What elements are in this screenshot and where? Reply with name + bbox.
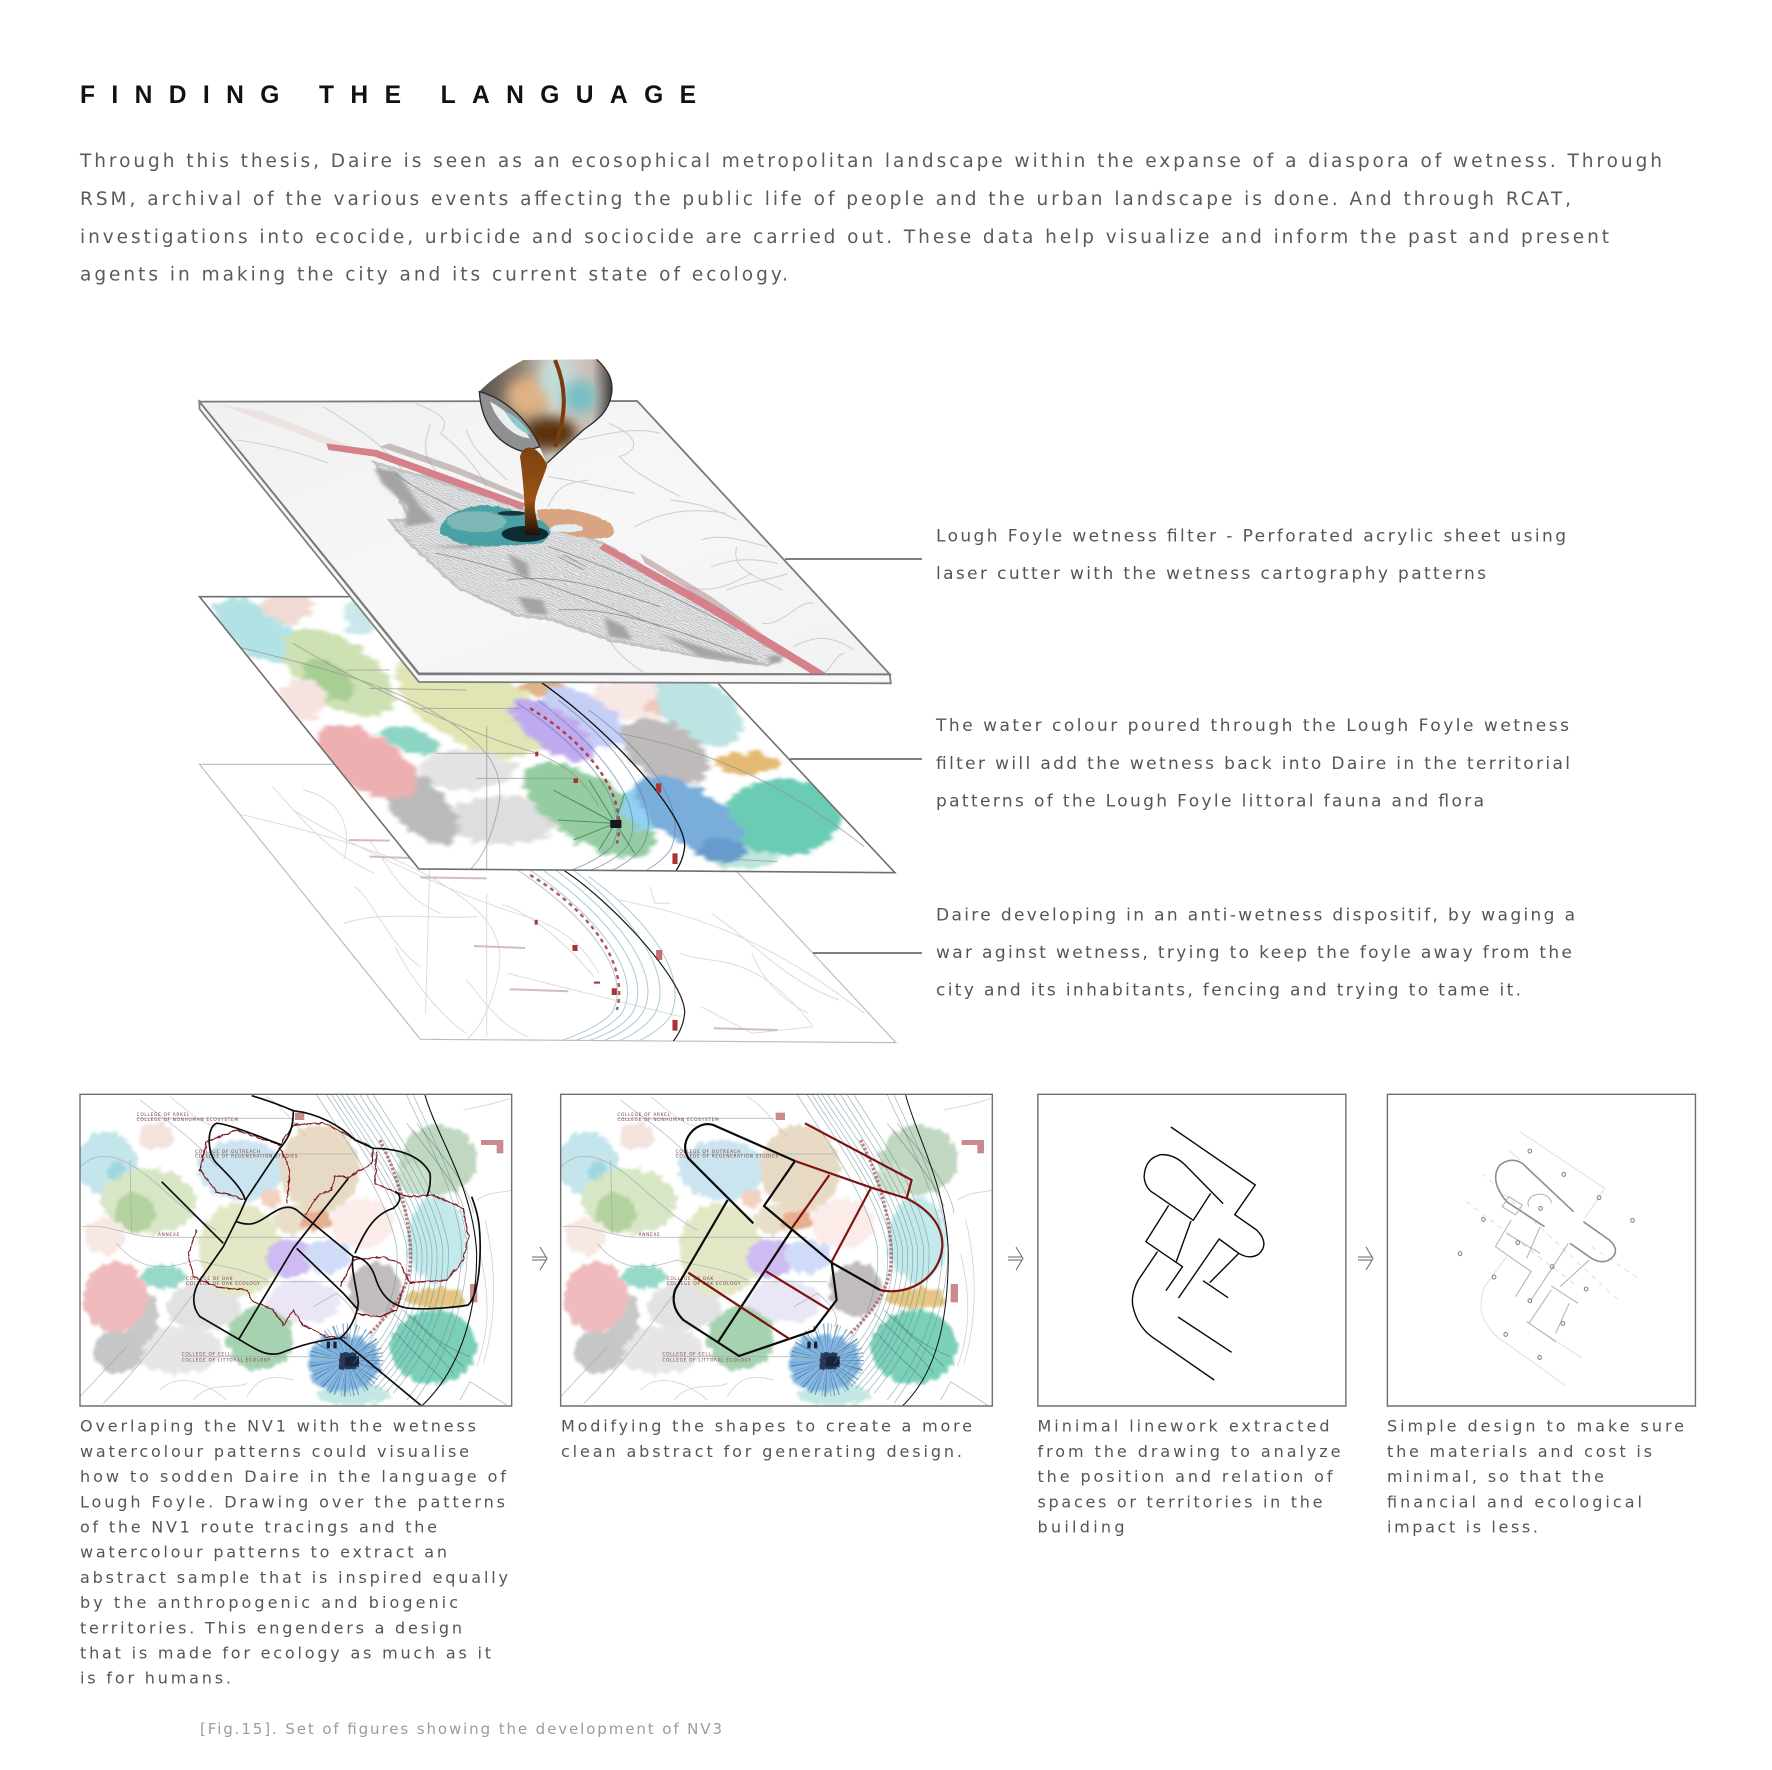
black abstract lines xyxy=(674,1124,880,1356)
caption: simple design: minimal, so that the xyxy=(1387,1467,1604,1486)
red wetness line xyxy=(326,443,525,510)
callout: layer 2 text: patterns of the Lough Foyle littoral fauna and flora xyxy=(936,792,1484,812)
extracted lines xyxy=(1132,1127,1264,1380)
callout: layer 2 text: The water colour poured through the Lough Foyle wetness xyxy=(935,716,1569,736)
thin river line xyxy=(902,1095,948,1406)
caption: simple design: impact is less. xyxy=(1387,1518,1538,1536)
leader line 2 xyxy=(790,758,922,760)
intro text block: Through this thesis, Daire is seen as an ecosophical metropolitan landscape within the expanse of a diaspora of wetness. Through xyxy=(79,151,1662,172)
callout: layer 1 text: laser cutter with the wetness cartography patterns xyxy=(936,564,1486,584)
plan column points xyxy=(1458,1149,1634,1359)
leader line 3 xyxy=(813,952,922,954)
caption: overlap: watercolour patterns could visualise xyxy=(80,1442,469,1461)
caption: modifying: clean abstract for generating design. xyxy=(561,1442,962,1461)
caption: modifying: Modifying the shapes to create a more xyxy=(561,1417,972,1436)
caption: overlap: how to sodden Daire in the language of xyxy=(80,1467,506,1486)
lake cartography xyxy=(221,405,374,457)
caption: overlap: Lough Foyle. Drawing over the patterns xyxy=(80,1492,505,1511)
caption: overlap: Overlaping the NV1 with the wetness xyxy=(80,1417,476,1436)
caption: simple design xyxy=(1387,1417,1684,1536)
callout: layer 2 text xyxy=(935,716,1570,812)
arrow 3 xyxy=(1358,1247,1373,1270)
plan walls xyxy=(1481,1132,1605,1385)
bucket body xyxy=(479,359,612,463)
caption: minimal linework xyxy=(1038,1417,1340,1536)
callout: layer 1 text: Lough Foyle wetness filter - Perforated acrylic sheet using xyxy=(936,526,1566,546)
panel: NV1 overlay map xyxy=(73,1090,520,1410)
black NV1 route lines xyxy=(162,1095,480,1406)
caption: overlap: territories. This engenders a design xyxy=(80,1618,462,1637)
panel: simple floor plan xyxy=(1387,1094,1695,1406)
caption: overlap: abstract sample that is inspired equally xyxy=(80,1568,508,1587)
sheet thickness xyxy=(199,402,891,683)
caption: modifying xyxy=(561,1417,972,1461)
layer 3: anti-wetness line map xyxy=(199,764,896,1043)
intro text block: investigations into ecocide, urbicide and sociocide are carried out. These data help visualize and inform the past and present xyxy=(80,227,1609,248)
leader line 1 xyxy=(785,558,922,560)
caption: overlap xyxy=(80,1417,508,1688)
river tracings xyxy=(237,403,854,673)
callout: layer 3 text: Daire developing in an anti-wetness dispositif, by waging a xyxy=(936,906,1575,926)
caption: minimal linework: Minimal linework extracted xyxy=(1038,1417,1330,1436)
red abstract lines xyxy=(688,1123,942,1339)
bucket opening xyxy=(479,392,540,452)
title: FINDING THE LANGUAGE xyxy=(80,82,696,109)
callout: layer 3 text: city and its inhabitants, fencing and trying to tame it. xyxy=(936,980,1521,1000)
icon: paint bucket pouring watercolour xyxy=(440,359,614,546)
panel: minimal linework xyxy=(1038,1094,1346,1406)
layer 2: watercolour wetness map xyxy=(197,589,895,875)
caption: minimal linework: building xyxy=(1038,1518,1124,1536)
callout: layer 3 text xyxy=(936,906,1575,1000)
poured stream xyxy=(520,448,547,535)
caption: simple design: financial and ecological xyxy=(1387,1492,1642,1511)
panel: exploded layers diagram xyxy=(197,359,922,1043)
intro text block xyxy=(79,151,1662,286)
caption: simple design: the materials and cost is xyxy=(1387,1442,1652,1461)
caption: minimal linework: from the drawing to analyze xyxy=(1038,1442,1340,1461)
red wetness territories xyxy=(188,1123,468,1338)
arrow 1 xyxy=(532,1247,547,1270)
arrow 2 xyxy=(1008,1247,1023,1270)
caption: overlap: that is made for ecology as much as it xyxy=(80,1644,491,1662)
intro text block: agents in making the city and its current state of ecology. xyxy=(80,264,788,286)
callout: layer 1 text xyxy=(936,526,1566,584)
caption: overlap: by the anthropogenic and biogenic xyxy=(80,1593,458,1612)
caption: simple design: Simple design to make sure xyxy=(1387,1417,1684,1436)
panel: modified abstract shapes map xyxy=(554,1090,1001,1410)
caption: overlap: watercolour patterns to extract an xyxy=(80,1543,447,1562)
caption: overlap: of the NV1 route tracings and the xyxy=(80,1518,437,1536)
caption: overlap: is for humans. xyxy=(80,1669,231,1688)
figure caption: [Fig.15]. Set of figures showing the development of NV3 xyxy=(200,1720,722,1738)
caption: minimal linework: the position and relation of xyxy=(1038,1467,1333,1486)
callout: layer 3 text: war aginst wetness, trying to keep the foyle away from the xyxy=(936,943,1572,963)
intro text block: RSM, archival of the various events affecting the public life of people and the urban landscape is done. And through RCAT, xyxy=(80,189,1571,210)
puddle xyxy=(440,505,614,546)
layer 1: Lough Foyle wetness filter sheet xyxy=(199,401,891,683)
callout: layer 2 text: filter will add the wetness back into Daire in the territorial xyxy=(936,754,1570,774)
caption: minimal linework: spaces or territories in the xyxy=(1038,1492,1322,1511)
